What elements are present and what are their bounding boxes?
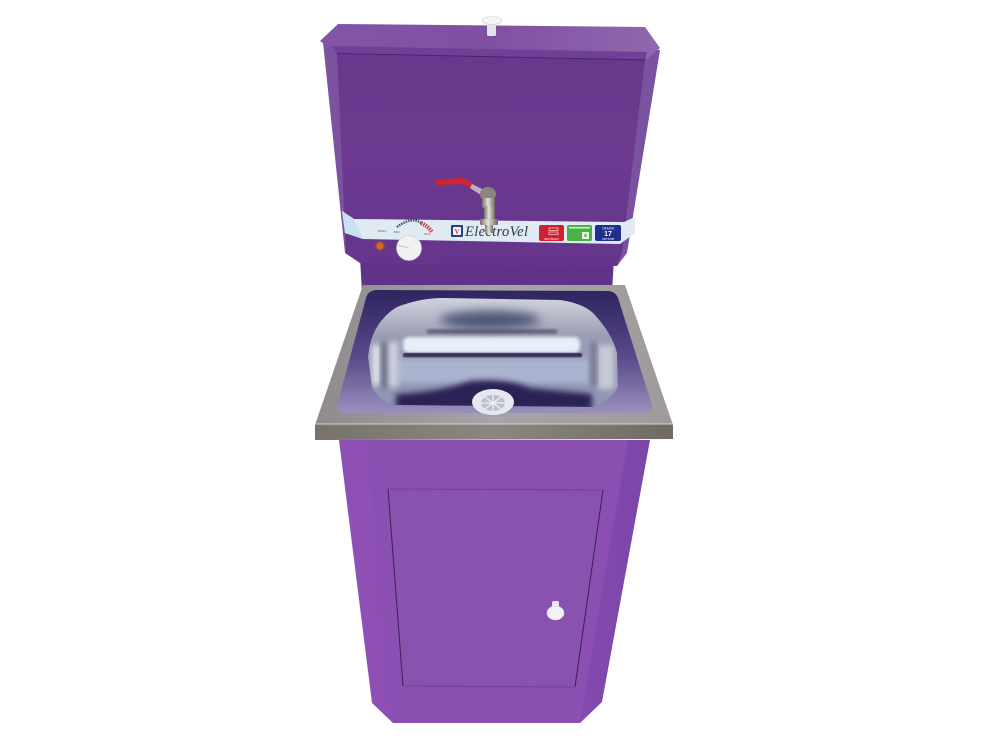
cabinet — [339, 440, 650, 723]
tank — [320, 16, 660, 292]
logo: V — [454, 228, 460, 236]
red lever — [435, 178, 473, 188]
blue badge: volume — [595, 225, 621, 241]
stainless sink — [315, 285, 673, 440]
label strip — [342, 211, 635, 244]
temperature gauge: MAX — [424, 232, 431, 236]
blue badge: volume: 17 — [604, 231, 612, 238]
bowl side walls — [372, 345, 380, 385]
brand name: ElectroVel — [464, 224, 528, 240]
tank lid — [320, 24, 660, 59]
valve body — [480, 187, 496, 201]
temperature gauge: ВЫКЛ — [378, 229, 386, 233]
product illustration: purple wash basin — [315, 16, 673, 723]
drain — [472, 389, 514, 415]
thermostat knob — [396, 236, 422, 260]
blue badge: volume: ЛИТРОВ — [602, 237, 614, 241]
sink recess — [337, 290, 652, 413]
temperature gauge — [378, 220, 432, 236]
red badge — [539, 225, 564, 241]
basin bowl — [368, 298, 618, 407]
green badge — [567, 225, 592, 241]
lever neck — [470, 184, 490, 199]
cabinet body — [339, 440, 650, 723]
sink rim — [315, 285, 673, 425]
door knob — [547, 601, 564, 620]
bowl floor — [397, 359, 589, 383]
tank front face — [337, 53, 645, 266]
blue badge: volume: ОБЪЕМ — [602, 226, 614, 230]
spout — [484, 206, 495, 222]
lid knob — [482, 16, 502, 36]
bowl highlight band — [403, 337, 580, 353]
bowl wall shadow — [440, 311, 540, 329]
temperature gauge: MIN — [394, 230, 400, 234]
sink front edge — [315, 424, 673, 440]
tank neck — [360, 258, 614, 292]
faucet — [435, 178, 498, 233]
tank body — [323, 42, 660, 266]
power indicator lamp — [375, 241, 385, 251]
cabinet door — [388, 489, 603, 687]
red badge: ВКЛ ВЫКЛ — [545, 237, 559, 241]
logo — [451, 225, 463, 237]
bowl dark crease — [403, 353, 582, 358]
